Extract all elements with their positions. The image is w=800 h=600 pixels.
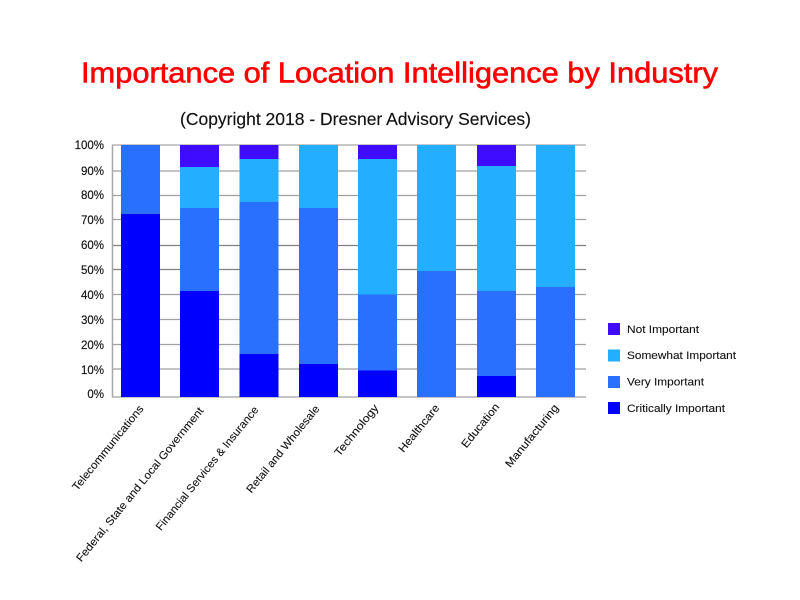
y axis labels: 70% bbox=[81, 215, 104, 227]
y axis labels: 0% bbox=[87, 389, 104, 401]
x axis labels: Education bbox=[459, 401, 502, 450]
y axis labels: 60% bbox=[81, 240, 104, 252]
bar: Telecommunications bbox=[121, 145, 160, 397]
y axis labels: 30% bbox=[81, 315, 104, 327]
bar: Federal, State and Local Government bbox=[180, 145, 219, 397]
x axis labels bbox=[70, 401, 561, 564]
bar: Education bbox=[477, 145, 516, 397]
legend item: Critically Important: Critically Important bbox=[627, 403, 725, 415]
x axis labels: Telecommunications bbox=[70, 403, 147, 493]
legend bbox=[608, 323, 736, 415]
y axis labels: 20% bbox=[81, 340, 104, 352]
x axis labels: Financial Services & Insurance bbox=[154, 404, 261, 533]
y axis labels bbox=[75, 140, 104, 401]
y axis labels: 40% bbox=[81, 290, 104, 302]
legend item: Not Important: Not Important bbox=[627, 324, 699, 336]
subtitle: (Copyright 2018 - Dresner Advisory Services) bbox=[180, 109, 531, 129]
bar: Retail and Wholesale bbox=[299, 145, 338, 397]
x axis labels: Healthcare bbox=[397, 402, 442, 455]
bar: Technology bbox=[358, 145, 397, 397]
bar: Manufacturing bbox=[536, 145, 575, 397]
y axis labels: 80% bbox=[81, 190, 104, 202]
x axis labels: Federal, State and Local Government bbox=[74, 405, 206, 564]
x axis labels: Retail and Wholesale bbox=[244, 403, 322, 496]
x axis labels: Manufacturing bbox=[503, 402, 561, 470]
bar: Healthcare bbox=[417, 145, 456, 397]
bar: Financial Services & Insurance bbox=[240, 145, 278, 397]
legend item: Very Important: Very Important bbox=[627, 376, 704, 388]
y axis labels: 100% bbox=[75, 140, 104, 152]
y axis labels: 50% bbox=[81, 265, 104, 277]
legend item: Somewhat Important: Somewhat Important bbox=[627, 350, 736, 362]
title: Importance of Location Intelligence by Industry bbox=[81, 58, 719, 90]
stacked bar chart bbox=[70, 140, 586, 564]
y axis labels: 10% bbox=[81, 365, 104, 377]
y axis labels: 90% bbox=[81, 166, 104, 178]
x axis labels: Technology bbox=[332, 402, 382, 459]
